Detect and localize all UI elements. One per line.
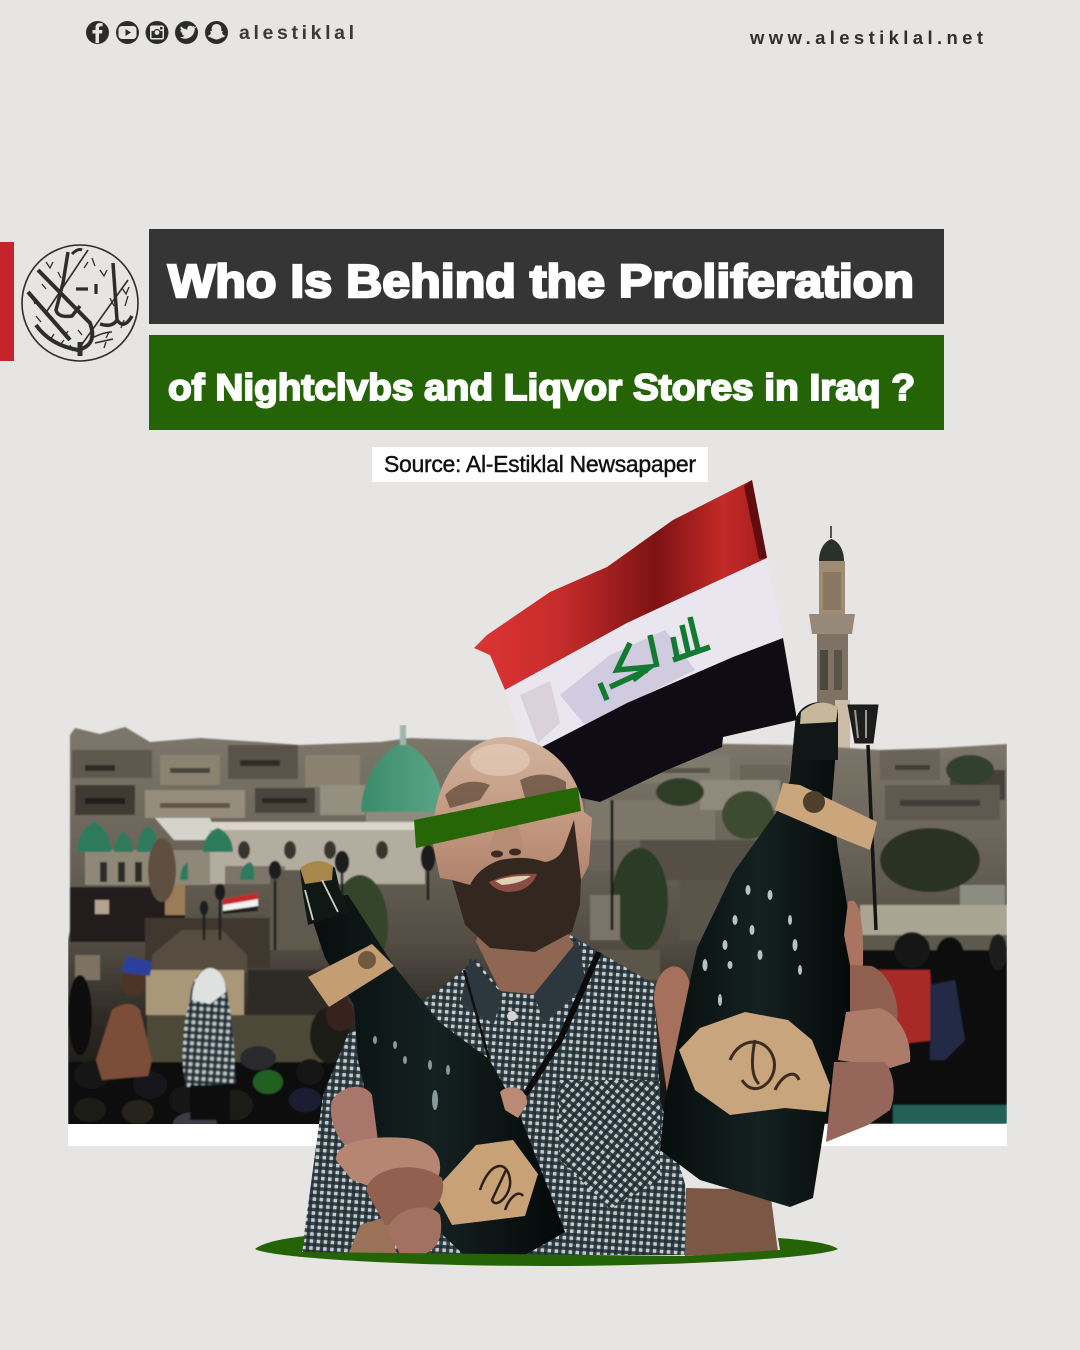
bottle cap	[792, 702, 838, 760]
thumb	[844, 901, 863, 975]
middle finger	[838, 1008, 910, 1068]
iraqi flag	[474, 480, 797, 802]
street lamps	[201, 800, 612, 1000]
city scene photo	[68, 725, 1007, 1136]
nose	[487, 825, 524, 857]
social icons row	[86, 21, 228, 44]
wrist	[348, 1215, 396, 1255]
mouth	[489, 874, 537, 892]
little finger	[388, 1207, 441, 1254]
man: head	[433, 737, 592, 952]
crowd: right	[850, 932, 1007, 1124]
icon: youtube	[116, 21, 139, 44]
thumb	[500, 1087, 527, 1118]
shirtless man	[96, 956, 152, 1080]
small iraqi flag in scene	[223, 893, 258, 914]
man: torso with checked shirt	[302, 926, 688, 1255]
flag inscription	[600, 617, 710, 700]
website url: www.alestiklal.net	[749, 27, 983, 48]
white mosque building	[85, 818, 425, 885]
street lamp right	[848, 705, 878, 930]
green mosque dome	[361, 725, 444, 824]
brand handle: alestiklal	[239, 22, 354, 44]
bottle highlights	[702, 885, 802, 1006]
forehead highlight	[470, 744, 530, 776]
white base strip	[68, 1120, 1007, 1146]
bottle cap	[300, 862, 350, 925]
right side buildings and trees	[585, 755, 1007, 980]
left hand	[331, 1087, 527, 1255]
small green domes	[77, 822, 254, 880]
icon: facebook	[86, 21, 109, 44]
main label	[679, 1012, 830, 1115]
distant buildings	[72, 745, 1005, 820]
left bottle	[300, 861, 565, 1255]
title bar: line two: of Nightclvbs and Liqvor Stores in Iraq ?	[168, 367, 915, 408]
ring finger	[366, 1167, 443, 1225]
icon: instagram	[146, 21, 168, 44]
icon: snapchat	[205, 21, 228, 44]
neck label	[308, 944, 394, 1007]
beard	[452, 820, 581, 952]
left lower buildings	[70, 838, 388, 1065]
red accent bar	[0, 242, 14, 361]
logo: calligraphy roundel	[22, 245, 138, 361]
bottle highlights	[373, 1036, 450, 1110]
title bar: line one: Who Is Behind the Proliferation	[168, 255, 914, 307]
main label	[434, 1140, 538, 1225]
right arm	[685, 1188, 778, 1256]
green ground ellipse	[255, 1236, 838, 1266]
right bottle	[660, 702, 877, 1207]
source label: Source: Al-Estiklal Newsapaper	[384, 451, 696, 477]
crowd: left	[68, 975, 354, 1136]
index finger	[331, 1087, 378, 1145]
index finger	[850, 965, 898, 1022]
title bar: line one	[149, 229, 944, 324]
source label	[372, 447, 708, 482]
neck label	[775, 783, 877, 850]
title bar: line two	[149, 335, 944, 430]
man in keffiyeh	[183, 968, 236, 1120]
minaret	[809, 526, 855, 810]
right palm	[654, 966, 697, 1100]
lanyard	[525, 952, 599, 1095]
icon: twitter	[175, 21, 198, 44]
right hand fingers	[826, 901, 910, 1142]
green eye bar	[414, 787, 581, 848]
brow shadow	[445, 774, 566, 808]
middle finger	[336, 1137, 440, 1190]
ring finger and heel	[826, 1062, 894, 1142]
